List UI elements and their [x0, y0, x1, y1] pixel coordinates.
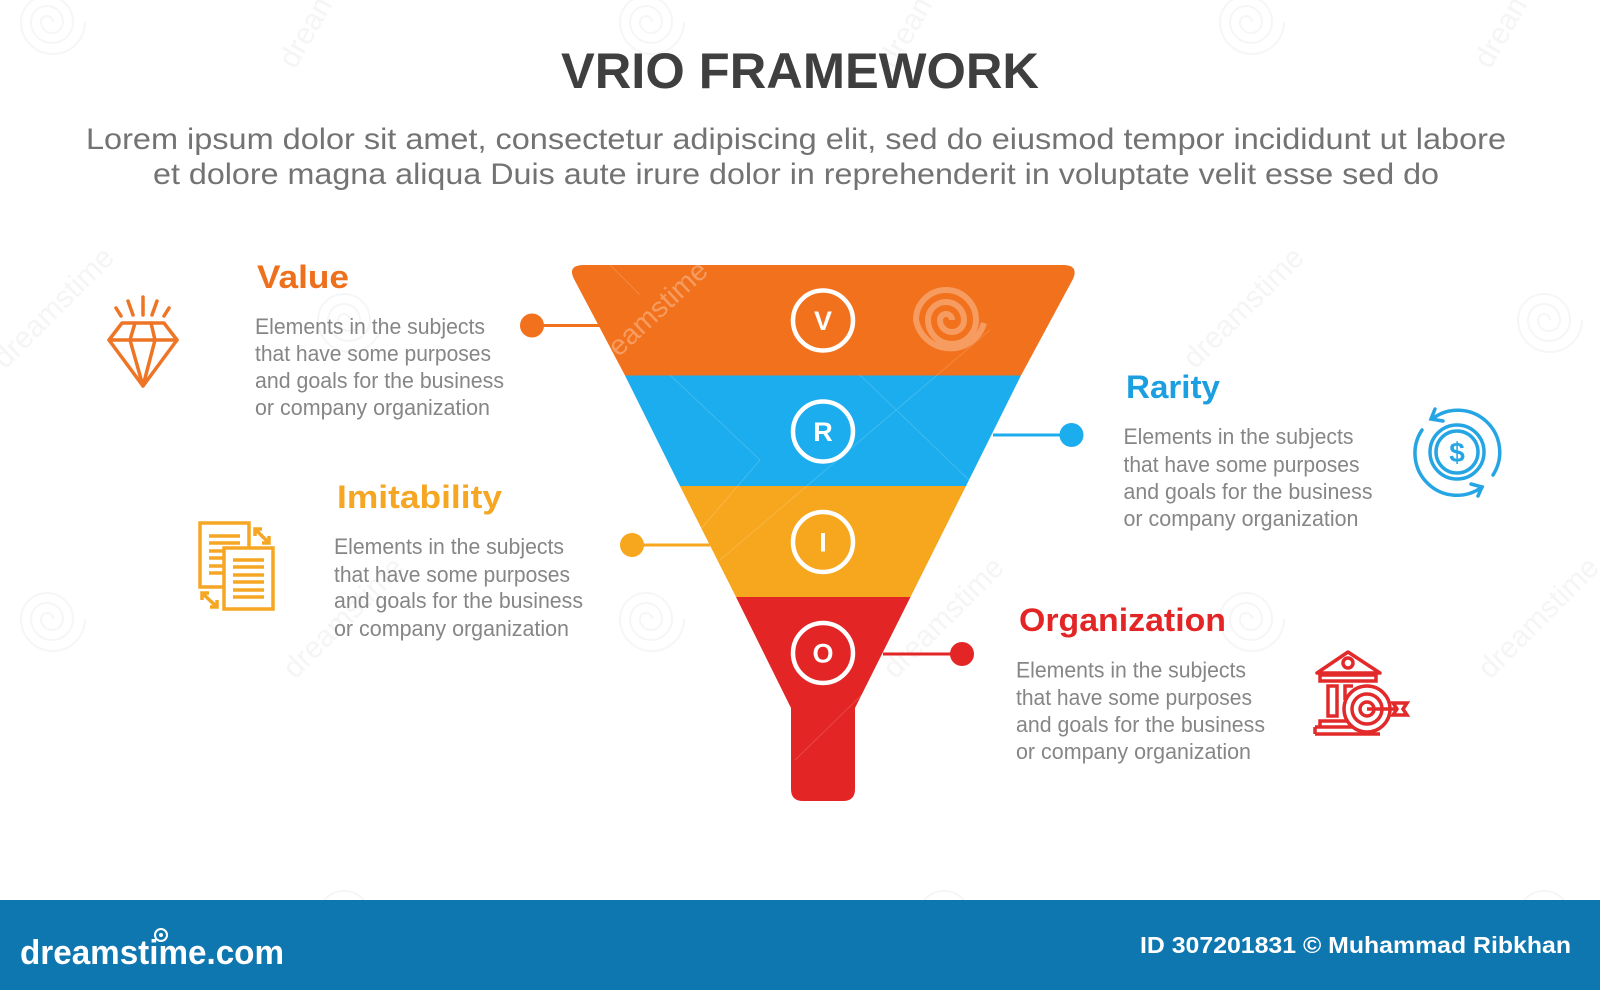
badge I	[793, 512, 853, 572]
panel: organization	[1016, 602, 1407, 764]
title: VRIO FRAMEWORK	[561, 43, 1039, 99]
connector: organization	[883, 642, 974, 666]
text block: rarity: and goals for the business	[1124, 479, 1372, 504]
text block: rarity: or company organization	[1124, 506, 1358, 531]
watermark on funnel: dreamstime	[583, 254, 714, 379]
text block: value: and goals for the business	[255, 368, 504, 393]
text block: value: or company organization	[255, 395, 490, 420]
text block: organization: Elements in the subjects	[1016, 658, 1246, 682]
badge O: O	[812, 638, 834, 668]
funnel chart	[572, 254, 1075, 801]
icon: copied documents	[200, 523, 273, 609]
text block: organization: and goals for the business	[1016, 712, 1265, 737]
icon: circular dollar: $	[1449, 437, 1465, 468]
badge R: R	[813, 417, 833, 447]
text block: organization	[1016, 658, 1265, 764]
heading: organization: Organization	[1019, 602, 1226, 638]
badge I: I	[819, 528, 827, 558]
badge V	[793, 290, 853, 350]
text block: value	[255, 314, 504, 420]
text block: imitability: and goals for the business	[334, 588, 583, 613]
funnel band: O organization with spout	[736, 597, 910, 801]
text: dreamstime	[877, 551, 1011, 685]
heading: value: Value	[257, 259, 349, 295]
footer bar	[0, 900, 1600, 990]
text block: imitability: that have some purposes	[334, 562, 570, 587]
text block: rarity: that have some purposes	[1124, 452, 1360, 477]
panel: imitability	[200, 479, 583, 641]
badge R	[793, 402, 853, 462]
text block: rarity	[1124, 424, 1372, 531]
footer logo: dreamstime.com	[20, 934, 284, 972]
text: dreamstime	[1177, 241, 1311, 375]
text block: imitability: Elements in the subjects	[334, 534, 564, 559]
funnel band: R rarity	[625, 376, 1021, 486]
funnel band: I imitability	[680, 486, 966, 597]
footer credit: ID 307201831 © Muhammad Ribkhan	[1140, 932, 1571, 958]
panel: rarity	[1124, 369, 1500, 531]
text block: organization: or company organization	[1016, 739, 1251, 764]
subtitle text block: Lorem ipsum dolor sit amet, consectetur adipiscing elit, sed do eiusmod tempor incididunt ut labore	[86, 123, 1506, 156]
panel: value	[109, 259, 504, 420]
icon: circular dollar	[1415, 409, 1500, 496]
text block: imitability	[334, 534, 583, 641]
text block: rarity: Elements in the subjects	[1124, 424, 1354, 449]
text block: organization: that have some purposes	[1016, 685, 1252, 710]
connector: imitability	[620, 533, 710, 557]
heading: imitability: Imitability	[337, 479, 502, 515]
text: dreamstime	[277, 551, 411, 685]
text block: imitability: or company organization	[334, 616, 569, 641]
watermark on funnel	[583, 254, 984, 379]
heading: rarity: Rarity	[1126, 369, 1220, 405]
text block: value: that have some purposes	[255, 341, 491, 366]
subtitle text block: et dolore magna aliqua Duis aute irure dolor in reprehenderit in voluptate velit esse sed do	[153, 158, 1439, 191]
icon: bank and target	[1315, 652, 1407, 734]
funnel band: V value	[572, 265, 1075, 376]
badge O	[793, 623, 853, 683]
badge V: V	[814, 306, 832, 336]
subtitle text block	[86, 123, 1506, 191]
connector: rarity	[993, 423, 1084, 447]
text block: value: Elements in the subjects	[255, 314, 485, 339]
icon: diamond	[109, 297, 177, 386]
connector: value	[520, 314, 600, 338]
